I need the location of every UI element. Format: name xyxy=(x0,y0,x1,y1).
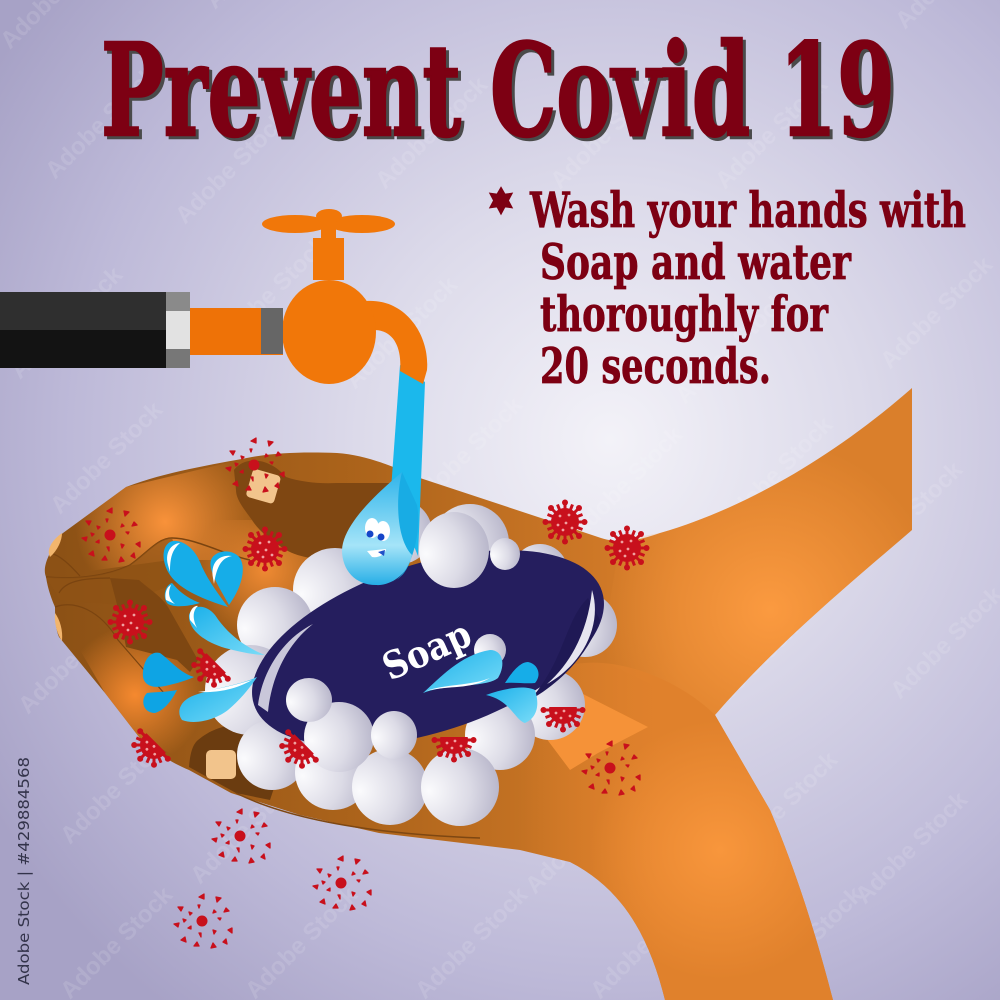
watermark: Adobe Stock xyxy=(565,421,688,544)
watermark: Adobe Stock xyxy=(875,251,998,374)
watermark: Adobe Stock xyxy=(210,231,333,354)
highlights xyxy=(46,453,337,577)
eyes xyxy=(365,518,379,538)
white droplet highlights xyxy=(165,543,490,692)
watermark: Adobe Stock xyxy=(720,746,843,869)
arm: lower overlay xyxy=(520,663,833,1000)
nail: fingertip bottom xyxy=(55,613,62,641)
pipe xyxy=(190,308,283,355)
soap label: Soap xyxy=(375,611,478,689)
back foam bubbles xyxy=(205,500,617,790)
valve body xyxy=(282,280,376,384)
watermark: Adobe Stock xyxy=(520,776,643,899)
nail: fingertip top xyxy=(49,533,62,557)
middle finger band xyxy=(46,538,185,605)
pipe connector xyxy=(166,292,190,311)
watermark: Adobe Stock xyxy=(180,581,303,704)
watermark: Adobe Stock xyxy=(5,261,128,384)
stock id: Adobe Stock | #429884568 xyxy=(15,757,33,985)
instruction text: thoroughly for xyxy=(540,285,829,343)
hand and arm silhouette xyxy=(45,388,912,1000)
spout xyxy=(366,301,427,384)
hands xyxy=(45,388,912,1000)
water splashes left xyxy=(143,541,265,722)
thumb shadow lower xyxy=(189,725,280,800)
palm crease xyxy=(540,693,648,770)
watermark: Adobe Stock xyxy=(710,71,833,194)
bullet star xyxy=(490,187,512,214)
instruction text: 20 seconds. xyxy=(540,337,771,395)
finger outline xyxy=(50,553,170,700)
viruses xyxy=(108,500,650,778)
faucet xyxy=(0,209,427,384)
soap shine left xyxy=(258,624,313,712)
soap bar xyxy=(228,512,628,784)
mouth xyxy=(367,549,386,557)
watermark: Adobe Stock xyxy=(680,616,803,739)
soap shade xyxy=(530,598,600,700)
watermark: Adobe Stock xyxy=(845,456,968,579)
watermark: Adobe Stock xyxy=(185,766,308,889)
wall pipe xyxy=(0,292,166,330)
watermark: Adobe Stock xyxy=(370,71,493,194)
water stream xyxy=(391,365,425,556)
watermark: Adobe Stock xyxy=(405,391,528,514)
nail: thumb top xyxy=(245,468,281,504)
soap splashes right xyxy=(423,650,539,723)
dark finger xyxy=(110,578,198,672)
watermark: Adobe Stock xyxy=(45,396,168,519)
handle xyxy=(262,215,328,233)
thumb shadow upper xyxy=(234,460,420,562)
watermark: Adobe Stock xyxy=(850,786,973,909)
watermark: Adobe Stock xyxy=(170,106,293,229)
watermark: Adobe Stock xyxy=(670,286,793,409)
watermark: Adobe Stock xyxy=(545,591,668,714)
soap shine right xyxy=(547,590,595,684)
watermark: Adobe Stock xyxy=(55,726,178,849)
front foam bubbles xyxy=(286,512,520,826)
virus bursts xyxy=(82,438,640,948)
watermark: Adobe Stock xyxy=(715,411,838,534)
instruction text xyxy=(490,181,966,395)
upper finger line xyxy=(46,538,250,578)
watermark: Adobe Stock xyxy=(545,71,668,194)
upper arm glow xyxy=(600,388,912,715)
instruction text: Soap and water xyxy=(540,233,852,291)
watermark: Adobe Stock xyxy=(340,271,463,394)
watermark: Adobe Stock xyxy=(40,61,163,184)
watermark: Adobe Stock xyxy=(13,596,136,719)
nail: thumb bottom xyxy=(206,750,236,779)
water drop character xyxy=(342,472,418,585)
lower hand crease xyxy=(236,793,480,838)
